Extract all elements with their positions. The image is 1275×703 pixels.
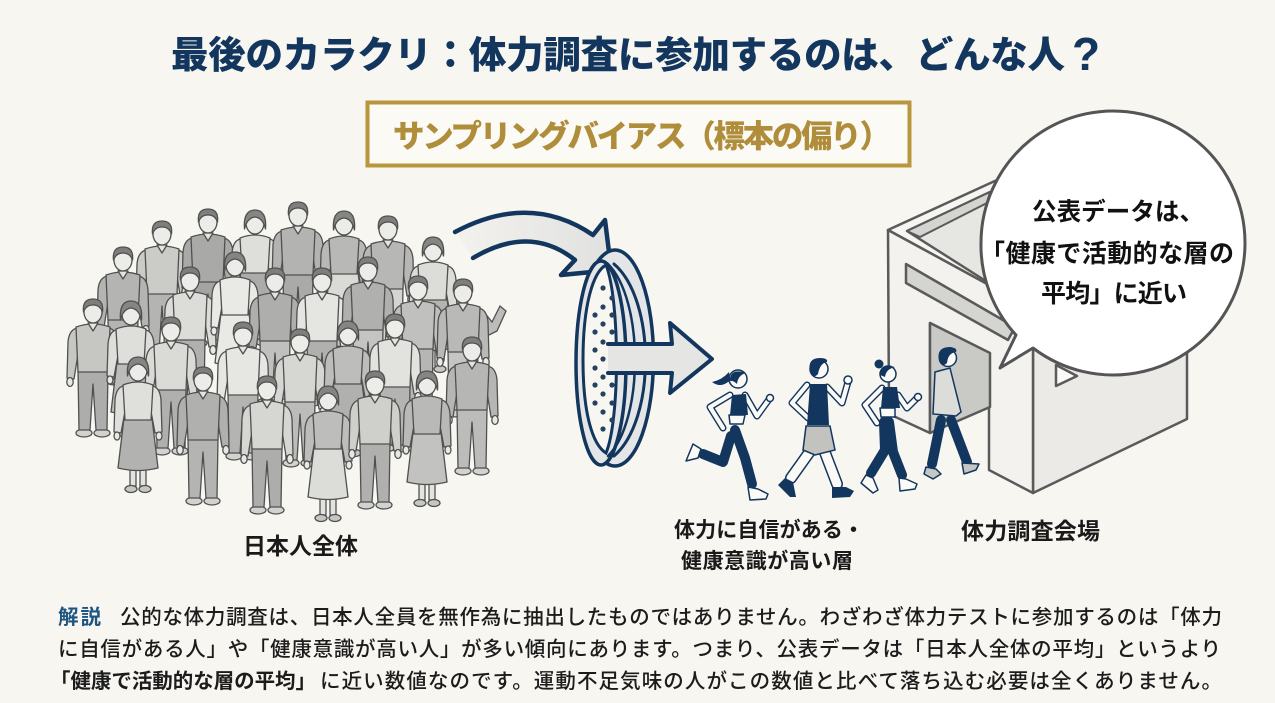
filter ring	[576, 250, 654, 466]
subtitle box: sampling bias: サンプリングバイアス（標本の偏り）	[393, 118, 891, 154]
explanation text	[50, 605, 1222, 693]
label: test venue: 体力調査会場	[961, 518, 1100, 544]
crowd: all Japanese people	[67, 202, 506, 522]
runner 1	[686, 370, 774, 500]
subtitle box: sampling bias	[368, 102, 910, 166]
title: ?	[1072, 28, 1100, 80]
straight arrow out of filter	[608, 323, 712, 393]
explanation text: 「健康で活動的な層の平均」	[50, 670, 316, 693]
label: confident and health-conscious group	[674, 518, 864, 573]
explanation text: に自信がある人」や「健康意識が高い人」が多い傾向にあります。つまり、公表データは「日本人全体の平均」というより	[58, 637, 1221, 661]
speech bubble: 公表データは、	[1032, 197, 1204, 226]
explanation text: に近い数値なのです。運動不足気味の人がこの数値と比べて落ち込む必要は全くありません。	[320, 670, 1222, 693]
runner 2	[778, 358, 854, 498]
speech bubble: 「健康で活動的な層の	[980, 240, 1234, 268]
runner 4 entering venue	[924, 347, 979, 479]
label: confident and health-conscious group: 健康意識が高い層	[681, 549, 853, 573]
explanation text: 公的な体力調査は、日本人全員を無作為に抽出したものではありません。わざわざ体力テストに参加するのは「体力	[120, 605, 1222, 629]
explanation text: 解説	[58, 606, 102, 629]
building: fitness test venue	[888, 180, 1187, 493]
label: confident and health-conscious group: 体力に自信がある・	[674, 518, 864, 542]
speech bubble	[980, 111, 1245, 375]
runner 3	[861, 360, 922, 493]
title: 最後のカラクリ：体力調査に参加するのは、どんな人	[171, 34, 1066, 76]
label: all Japanese: 日本人全体	[243, 533, 358, 559]
dots	[592, 285, 615, 432]
speech bubble: 平均」に近い	[1041, 280, 1187, 308]
curved arrow into filter	[455, 213, 609, 275]
person waving	[437, 279, 506, 417]
